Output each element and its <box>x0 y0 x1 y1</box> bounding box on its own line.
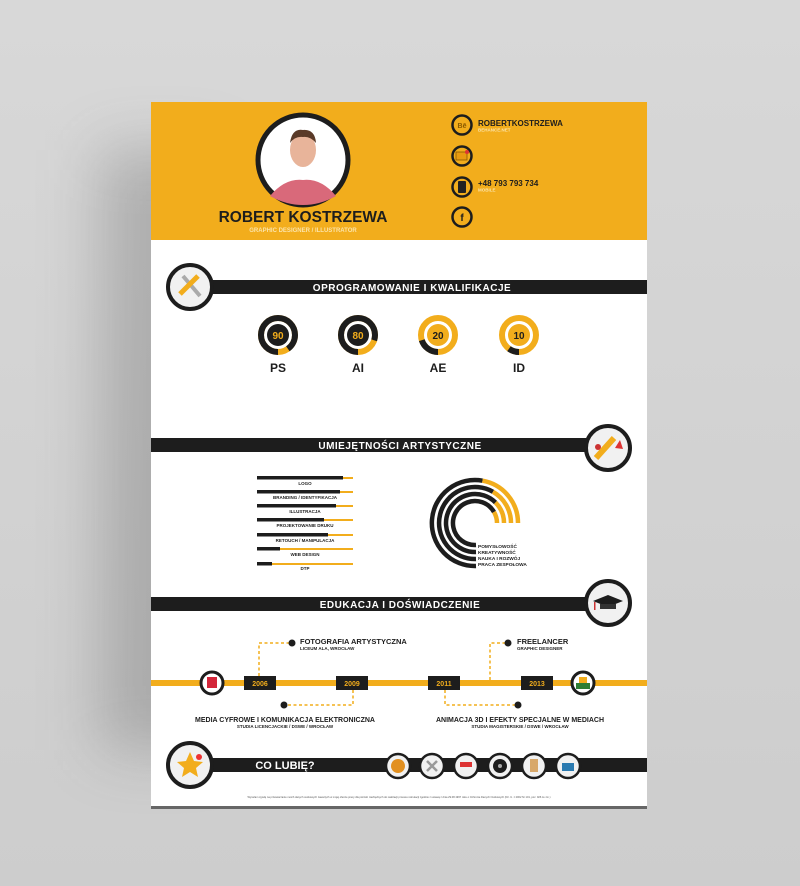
section 3 bar: EDUKACJA I DOŚWIADCZENIE <box>320 598 480 611</box>
arc legend: NAUKA I ROZWÓJ <box>478 554 521 562</box>
section 3 bar <box>151 597 591 611</box>
timeline labels: FOTOGRAFIA ARTYSTYCZNA <box>300 637 407 646</box>
skill bars: DTP <box>300 566 310 571</box>
donut charts: 90 <box>272 331 284 342</box>
timeline labels <box>195 637 604 729</box>
donut charts: ID <box>513 361 525 375</box>
timeline <box>151 640 647 708</box>
page shadow <box>100 150 220 750</box>
arc legend: PRACA ZESPOŁOWA <box>478 562 527 568</box>
icon: tools <box>168 265 212 309</box>
donut charts: AI <box>352 361 364 375</box>
header <box>151 102 647 240</box>
arc legend <box>478 542 527 568</box>
donut charts <box>261 318 536 375</box>
skill bars: LOGO <box>298 481 312 486</box>
timeline: 2006 <box>252 681 268 688</box>
section 2 bar: UMIEJĘTNOŚCI ARTYSTYCZNE <box>318 439 482 452</box>
timeline labels: STUDIA LICENCJACKIE / DSWE / WROCŁAW <box>237 724 334 729</box>
contact text: ROBERTKOSTRZEWA <box>478 119 563 128</box>
contact icons: Bē <box>458 123 467 130</box>
timeline labels: STUDIA MAGISTERSKIE / DSWE / WROCŁAW <box>471 724 569 729</box>
arc chart <box>432 480 518 566</box>
donut charts: AE <box>430 361 446 375</box>
contact icons <box>452 116 472 226</box>
header: +48 793 793 734 <box>478 179 539 188</box>
icon: pencils <box>586 426 630 470</box>
donut charts: 10 <box>513 331 525 342</box>
footnote: Wyrażam zgodę na przetwarzanie moich danych osobowych zawartych w mojej ofercie pracy dla potrzeb niezbędnych do realizacji procesu rekrutacji zgodnie z ustawą z dnia 29.08.1997 roku o Ochronie Danych Osobowych (Dz. U. z 2002 Nr 101, poz. 926 ze zm.) <box>247 795 551 799</box>
subtitle: GRAPHIC DESIGNER / ILLUSTRATOR <box>249 228 357 234</box>
timeline: 2009 <box>344 681 360 688</box>
skill bars <box>257 476 353 571</box>
timeline labels: ANIMACJA 3D I EFEKTY SPECJALNE W MEDIACH <box>436 717 604 724</box>
skill bars: BRANDING / IDENTYFIKACJA <box>273 495 338 500</box>
skill bars: RETOUCH / MANIPULACJA <box>276 538 335 543</box>
skill bars: PROJEKTOWANIE DRUKU <box>277 523 333 528</box>
timeline labels: LICEUM ALA, WROCŁAW <box>300 646 355 651</box>
timeline labels: GRAPHIC DESIGNER <box>517 646 563 651</box>
section 1 bar: OPROGRAMOWANIE I KWALIFIKACJE <box>313 283 511 294</box>
donut charts: 20 <box>432 331 444 342</box>
arc legend: POMYSŁOWOŚĆ <box>478 542 517 550</box>
arc legend: KREATYWNOŚĆ <box>478 548 516 556</box>
donut charts: 80 <box>352 331 364 342</box>
contact icons: f <box>460 213 464 224</box>
section 1 bar <box>205 280 647 294</box>
timeline labels: MEDIA CYFROWE I KOMUNIKACJA ELEKTRONICZNA <box>195 717 375 724</box>
header: BEHANCE.NET <box>478 128 511 132</box>
name: ROBERT KOSTRZEWA <box>219 209 387 226</box>
section 4 bar <box>205 758 647 772</box>
timeline labels: FREELANCER <box>517 637 569 646</box>
photo <box>258 115 348 205</box>
timeline: 2013 <box>529 681 545 688</box>
donut charts: PS <box>270 361 286 375</box>
section 4 bar: CO LUBIĘ? <box>255 760 315 772</box>
timeline: 2011 <box>436 681 452 688</box>
skill bars: WEB DESIGN <box>290 552 320 557</box>
skill bars: ILLUSTRACJA <box>289 509 321 514</box>
icon: star <box>168 743 212 787</box>
icon: graduation cap <box>586 581 630 625</box>
header: MOBILE <box>478 188 496 192</box>
section 2 bar <box>151 438 591 452</box>
hobby icons <box>386 754 580 778</box>
